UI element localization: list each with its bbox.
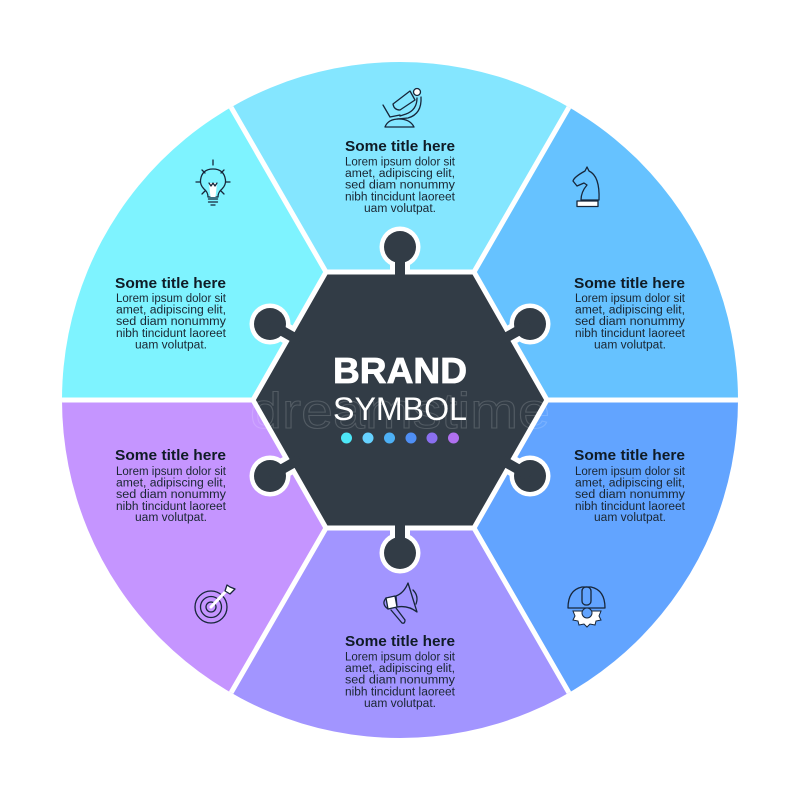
text block: bottom left: sed diam nonummy [116, 489, 226, 501]
segment: bottom right [477, 401, 738, 692]
text block: top left: Some title here [115, 275, 226, 292]
text block: top left: sed diam nonummy [116, 316, 226, 328]
text block: top: uam volutpat. [364, 203, 436, 215]
text block: bottom left: amet, adipiscing elit, [116, 478, 226, 490]
circular wheel [62, 62, 738, 738]
text block: top left: Lorem ipsum dolor sit [116, 293, 227, 305]
text block: bottom: Some title here [345, 633, 455, 650]
icon: target with arrow [195, 585, 235, 623]
text block: bottom right: sed diam nonummy [575, 489, 685, 501]
text block: bottom: nibh tincidunt laoreet [345, 686, 456, 698]
text block: bottom left [115, 447, 227, 524]
text block: top: Lorem ipsum dolor sit [345, 156, 456, 168]
text block: bottom: amet, adipiscing elit, [345, 663, 455, 675]
watermark: dreamstime [250, 383, 550, 439]
text block: top left [115, 275, 227, 352]
text block: bottom right: uam volutpat. [594, 512, 666, 524]
icon: light bulb [196, 160, 230, 205]
colour dots [341, 432, 459, 444]
text block: top: nibh tincidunt laoreet [345, 192, 456, 204]
text block: top [345, 138, 456, 215]
segment: bottom left [62, 402, 323, 692]
central hexagon with connectors [250, 226, 550, 574]
segment: bottom [231, 530, 569, 738]
segment: top left [62, 107, 323, 398]
brand subtitle: SYMBOL [333, 391, 467, 427]
icon: helmet and gear [568, 587, 605, 627]
text block: top right: sed diam nonummy [575, 316, 685, 328]
text block: bottom right [574, 447, 686, 524]
text block: bottom right: amet, adipiscing elit, [575, 478, 685, 490]
text block: bottom: uam volutpat. [364, 698, 436, 710]
text block: bottom left: Some title here [115, 447, 226, 464]
text block: top right: Lorem ipsum dolor sit [575, 293, 686, 305]
segment: top right [477, 107, 738, 398]
text block: top: sed diam nonummy [345, 180, 455, 192]
icon: chess knight [573, 167, 599, 206]
text block: top left: nibh tincidunt laoreet [116, 328, 227, 340]
text block: top right [574, 275, 686, 352]
text block: top right: Some title here [574, 275, 685, 292]
text block: top right: nibh tincidunt laoreet [575, 328, 686, 340]
text block: top left: amet, adipiscing elit, [116, 304, 226, 316]
segment: top [231, 62, 569, 270]
text block: top right: uam volutpat. [594, 340, 666, 352]
icon: microscope [383, 88, 421, 127]
text block: bottom [345, 633, 456, 710]
text block: bottom: Lorem ipsum dolor sit [345, 652, 456, 664]
text block: bottom right: nibh tincidunt laoreet [575, 501, 686, 513]
brand title: BRAND [333, 350, 467, 391]
text block: top: Some title here [345, 138, 455, 155]
text block: bottom right: Lorem ipsum dolor sit [575, 466, 686, 478]
text block: bottom left: Lorem ipsum dolor sit [116, 466, 227, 478]
icon: megaphone [384, 583, 417, 623]
text block: top: amet, adipiscing elit, [345, 168, 455, 180]
text block: bottom: sed diam nonummy [345, 674, 455, 686]
text block: top right: amet, adipiscing elit, [575, 304, 685, 316]
text block: bottom left: uam volutpat. [135, 512, 207, 524]
text block: top left: uam volutpat. [135, 340, 207, 352]
text block: bottom left: nibh tincidunt laoreet [116, 501, 227, 513]
text block: bottom right: Some title here [574, 447, 685, 464]
